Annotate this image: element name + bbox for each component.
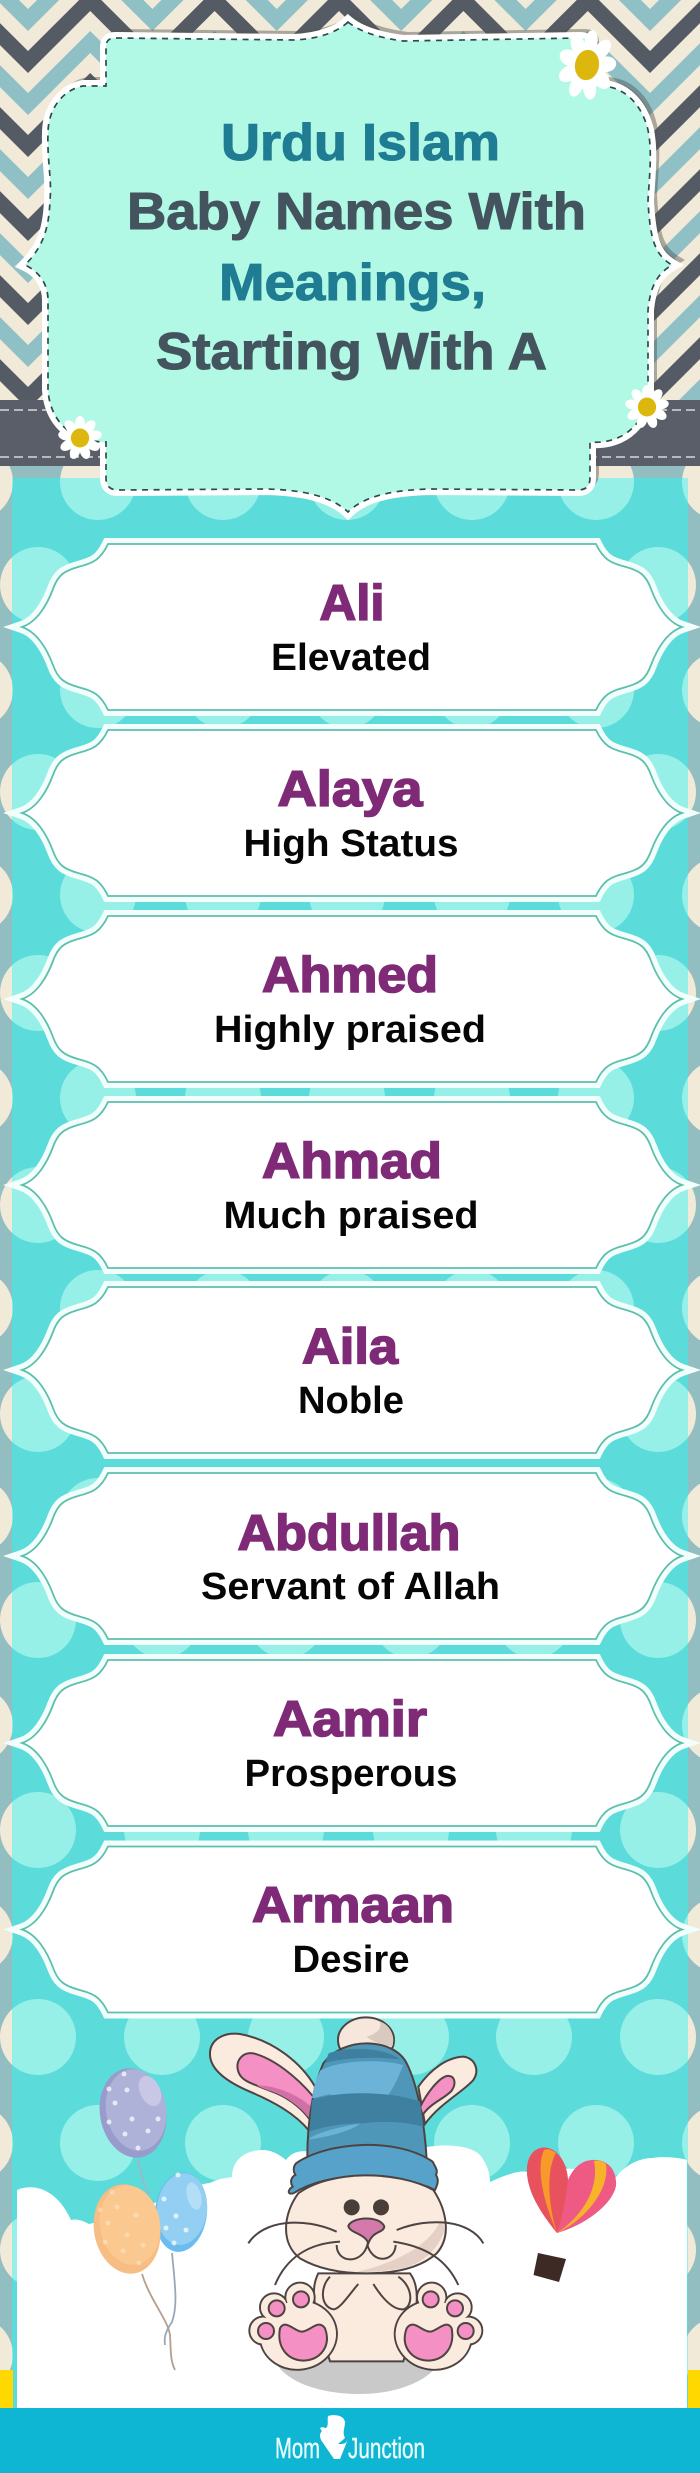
card: Aamir: Prosperous: [244, 1753, 458, 1795]
card: Alaya: High Status: [244, 823, 458, 865]
card: Armaan: Armaan: [252, 1877, 454, 1933]
icon: daisy bottom left: [57, 416, 103, 460]
card: Alaya: Alaya: [278, 761, 424, 817]
card: Aila: Aila: [302, 1318, 399, 1374]
icon: daisy right: [624, 385, 670, 429]
right ear: [418, 2057, 476, 2124]
card: Ahmed: [22, 916, 682, 1082]
title plaque: [25, 17, 677, 512]
balloons: [87, 2063, 211, 2370]
icon: heart hot-air balloon: [527, 2148, 616, 2282]
pompom: [338, 2017, 394, 2063]
white clouds: [17, 2146, 687, 2408]
card: Ali: [22, 544, 682, 710]
card: Ahmad: Ahmad: [262, 1133, 442, 1189]
card: Aila: [22, 1287, 682, 1453]
card: Ali: Elevated: [271, 637, 431, 679]
head: [286, 2175, 446, 2273]
card: Ahmed: Highly praised: [214, 1009, 486, 1051]
card: Ahmad: Much praised: [224, 1195, 478, 1237]
icon: daisy top right: [552, 25, 622, 106]
body: [314, 2273, 417, 2361]
card: Alaya: [22, 730, 682, 896]
card: Abdullah: Abdullah: [238, 1505, 460, 1561]
footer logo: Junction: [348, 2433, 425, 2465]
card: Ahmed: Ahmed: [262, 947, 438, 1003]
footer logo: [275, 2415, 425, 2465]
title: Starting With A: [156, 323, 547, 381]
footer bar: [0, 2408, 700, 2473]
card: Aamir: [22, 1660, 682, 1826]
dark stitched band: [0, 400, 700, 466]
title: [127, 114, 586, 381]
illustration: bunny with hat: [210, 2017, 483, 2394]
arms: [323, 2277, 410, 2309]
ground shadow: [272, 2353, 443, 2394]
footer logo: Mom: [275, 2433, 320, 2465]
card: Armaan: [22, 1846, 682, 2012]
card: Ali: Ali: [320, 575, 384, 631]
title: Baby Names With: [127, 183, 586, 241]
left ear: [210, 2034, 315, 2131]
hat: [307, 2043, 427, 2160]
card: Ahmad: [22, 1102, 682, 1268]
hat brim: [289, 2145, 438, 2194]
title: Urdu Islam: [221, 114, 500, 172]
card: Armaan: Desire: [292, 1939, 410, 1981]
face: [248, 2199, 483, 2285]
card: Aamir: Aamir: [273, 1691, 427, 1747]
feet: [249, 2283, 482, 2375]
title: Meanings,: [219, 254, 486, 312]
card: Aila: Noble: [298, 1380, 404, 1422]
chevron background: [0, 0, 700, 440]
card: Abdullah: [22, 1473, 682, 1639]
card: Abdullah: Servant of Allah: [201, 1566, 500, 1608]
